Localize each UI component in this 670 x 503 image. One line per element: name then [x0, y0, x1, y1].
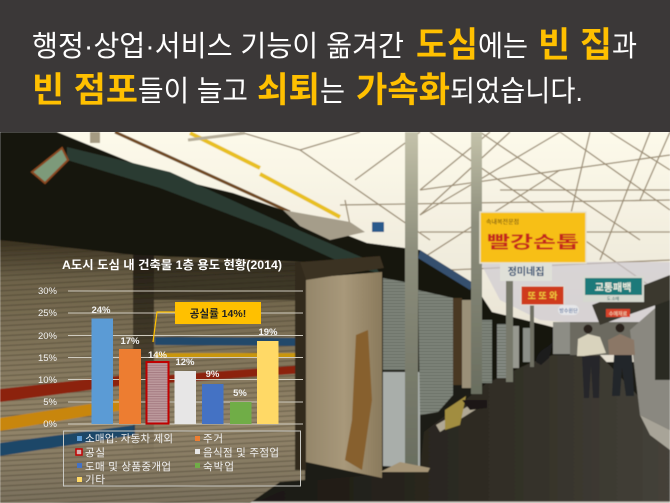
y axis labels: 0% — [43, 419, 58, 430]
header band — [0, 0, 670, 132]
legend — [64, 431, 300, 486]
sign: small round: 방수원단 — [559, 308, 578, 314]
value labels: 14% — [148, 350, 168, 361]
sign: red — [521, 286, 564, 305]
legend: 숙박업 — [203, 460, 234, 473]
headline line 2: 들이 늘고 — [138, 76, 248, 108]
value labels: 17% — [120, 336, 140, 347]
sign: yellow nail shop: 빨강손톱 — [487, 233, 579, 252]
sign: jeongmi: 정미네집 — [508, 265, 544, 278]
headline line 2: 빈 점포 — [32, 71, 138, 110]
man in white shirt — [577, 324, 606, 398]
value labels: 5% — [233, 388, 247, 399]
motorcycle — [536, 342, 553, 365]
callout: vacancy rate: 공실률 14%! — [190, 307, 246, 320]
headline line 1: 도심 — [416, 26, 478, 65]
headline line 2 — [32, 71, 583, 110]
side shutters — [383, 278, 640, 430]
headline line 2: 되었습니다. — [450, 76, 583, 108]
legend: 도매 및 상품중개업 — [85, 460, 171, 473]
photo: deserted shopping arcade background — [0, 132, 670, 503]
legend: 공실 — [85, 447, 105, 459]
two men walking — [577, 324, 635, 398]
y axis labels: 15% — [38, 353, 58, 364]
legend: 음식점 및 주점업 — [203, 446, 279, 459]
headline line 1 — [32, 26, 637, 65]
sign: teal: 교통패백 — [595, 281, 631, 294]
headline line 1: 에는 — [478, 31, 528, 63]
headline line 1: 과 — [612, 31, 637, 63]
y axis labels: 10% — [38, 375, 58, 386]
sign: yellow nail shop — [480, 212, 586, 263]
value labels: 19% — [258, 327, 278, 338]
value labels: 9% — [206, 369, 220, 380]
steel columns — [380, 132, 534, 472]
y axis labels: 25% — [38, 308, 58, 319]
sign: small red — [606, 309, 630, 318]
sign: small round — [558, 305, 579, 315]
sign: jeongmi — [500, 263, 552, 281]
right shops — [592, 275, 670, 430]
arcade roof — [0, 132, 670, 362]
value labels: 12% — [175, 357, 195, 368]
floor — [255, 355, 670, 503]
legend: 소매업: 자동차 제외 — [85, 432, 173, 445]
y axis labels: 5% — [43, 397, 58, 408]
chart title: A도시 도심 내 건축물 1층 용도 현황(2014) — [62, 257, 282, 272]
sign: small red: 수예재료 — [609, 310, 628, 318]
shop signs — [480, 212, 644, 318]
value labels — [91, 305, 278, 399]
headline line 1: 행정·상업·서비스 기능이 옮겨간 — [32, 30, 404, 63]
chart: 1st floor building use — [38, 257, 303, 486]
sign: red: 또 또 와 — [528, 291, 558, 301]
y axis labels: 20% — [38, 331, 58, 342]
headline line 2: 가속화 — [356, 71, 450, 110]
man in brown shirt — [608, 324, 635, 396]
headline line 1: 빈 집 — [538, 26, 612, 65]
y axis labels — [38, 286, 58, 430]
y axis labels: 30% — [38, 286, 58, 297]
sign: yellow nail shop: 속내복전문점 — [486, 218, 519, 226]
bars — [92, 318, 278, 424]
headline line 2: 쇠퇴 — [257, 71, 320, 110]
legend: 기타 — [85, 474, 105, 486]
left shop building, dark eaves — [0, 132, 600, 380]
headline line 2: 는 — [320, 76, 345, 108]
callout: vacancy rate — [153, 302, 261, 342]
value labels: 24% — [91, 305, 111, 316]
sign: teal — [583, 276, 644, 302]
cream plaster wall — [300, 256, 420, 478]
sign: teal: 도.소매 — [607, 295, 619, 301]
legend: 주거 — [203, 433, 223, 445]
rolled shutters with coloured stripes — [0, 240, 306, 503]
